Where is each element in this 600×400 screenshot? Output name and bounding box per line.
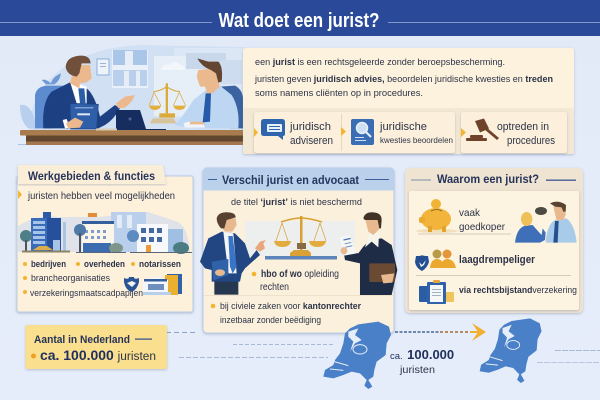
label: juridische kwesties beoordelen <box>379 121 453 145</box>
label: optreden in procedures: optreden in <box>497 121 549 133</box>
label: ca. 100.000 juristen: juristen <box>399 365 435 376</box>
title: Wat doet een jurist? <box>218 10 380 32</box>
map: Nederland rechts <box>480 318 542 383</box>
panel: waarom een jurist <box>405 168 583 313</box>
text block: definitie: juristen geven juridisch advies, beoordelen juridische kwesties en treden <box>254 74 553 85</box>
heading tab: Werkgebieden & functies <box>28 171 155 183</box>
list: werkgebieden: bedrijven <box>31 259 66 270</box>
label: vaak goedkoper: goedkoper <box>459 221 505 233</box>
heading <box>203 168 394 190</box>
icon: schild en mensen <box>415 250 456 271</box>
icon: schild en kantoor <box>124 274 182 295</box>
callout: aantal in Nederland <box>26 325 167 369</box>
heading: Waarom een jurist? <box>437 174 539 186</box>
dashed connector lines <box>166 332 600 362</box>
list: werkgebieden: overheden <box>84 259 125 270</box>
desk <box>20 130 247 136</box>
text block: definitie: soms namens cliënten op in procedures. <box>255 88 423 99</box>
bullet: hbo of wo: hbo of wo opleiding <box>261 269 339 280</box>
label: ca. 100.000 juristen: ca. 100.000 <box>390 346 454 363</box>
bullet: kantonrechter <box>211 301 361 326</box>
label: vaak goedkoper: vaak <box>459 207 481 219</box>
illustration: jurist in gesprek aan bureau <box>18 45 247 145</box>
illustration: gebouwen <box>18 212 192 254</box>
heading: Verschil jurist en advocaat <box>222 173 359 187</box>
label: juridische kwesties beoordelen: juridische <box>379 121 427 133</box>
right person group in crop coordinates <box>149 58 243 128</box>
icon: speech bubble <box>261 119 285 140</box>
heading tab <box>18 165 166 184</box>
bullet: kantonrechter: inzetbaar zonder beëdiging <box>220 315 321 326</box>
icon: spaarvarken <box>416 199 458 233</box>
panel: werkgebieden en functies <box>17 165 193 312</box>
label: vaak goedkoper <box>459 207 505 233</box>
subtitle: de titel ‘jurist’ is niet beschermd <box>231 197 362 208</box>
label: juridisch adviseren <box>289 121 333 147</box>
list: werkgebieden: notarissen <box>139 259 181 270</box>
label: via rechtsbijstandverzekering: via rechtsbijstandverzekering <box>459 285 577 296</box>
bullet: kantonrechter: bij civiele zaken voor kantonrechter <box>220 301 361 312</box>
left person group in crop coordinates <box>20 56 135 129</box>
list: werkgebieden: verzekeringsmaatscadpapijen <box>30 288 143 299</box>
intro line: juristen hebben veel mogelijkheden <box>27 191 175 202</box>
person: advocaat <box>339 212 397 295</box>
icon: klembord <box>419 280 454 304</box>
icon: magnifier <box>351 119 374 145</box>
illustration: weegschaal <box>245 216 355 260</box>
text block: definitie <box>254 57 553 99</box>
card: optreden in procedures <box>461 112 567 153</box>
list: werkgebieden: brancheorganisaties <box>31 273 110 284</box>
dashed arrow <box>395 323 486 341</box>
label: laagdrempeliger: laagdrempeliger <box>459 254 536 266</box>
illustration: gesprek met jurist <box>515 202 577 243</box>
label: ca. 100.000 juristen <box>390 346 454 376</box>
label: juridisch adviseren: juridisch <box>289 121 331 133</box>
card: juridisch adviseren en kwesties beoordelen <box>254 112 455 153</box>
header banner with title <box>0 0 600 36</box>
person: jurist <box>200 212 266 295</box>
scales <box>153 87 180 92</box>
panel: definitie <box>243 48 574 154</box>
map: Nederland links <box>323 322 391 389</box>
label: optreden in procedures: procedures <box>507 135 555 147</box>
laptop <box>116 110 166 130</box>
callout: aantal in Nederland: Aantal in Nederland <box>34 334 130 346</box>
label: optreden in procedures <box>497 121 555 147</box>
text block: definitie: een jurist is een rechtsgeleerde zonder beroepsbescherming. <box>255 57 505 68</box>
bullet: hbo of wo: rechten <box>260 282 289 293</box>
bullet: hbo of wo <box>252 269 339 293</box>
panel: verschil jurist en advocaat <box>200 168 397 333</box>
label: juridische kwesties beoordelen: kwesties beoordelen <box>380 136 453 145</box>
icon: gavel <box>466 118 499 141</box>
callout: aantal in Nederland: ca. 100.000 juristen <box>40 348 156 363</box>
label: juridisch adviseren: adviseren <box>290 135 333 147</box>
list: werkgebieden <box>23 259 181 299</box>
